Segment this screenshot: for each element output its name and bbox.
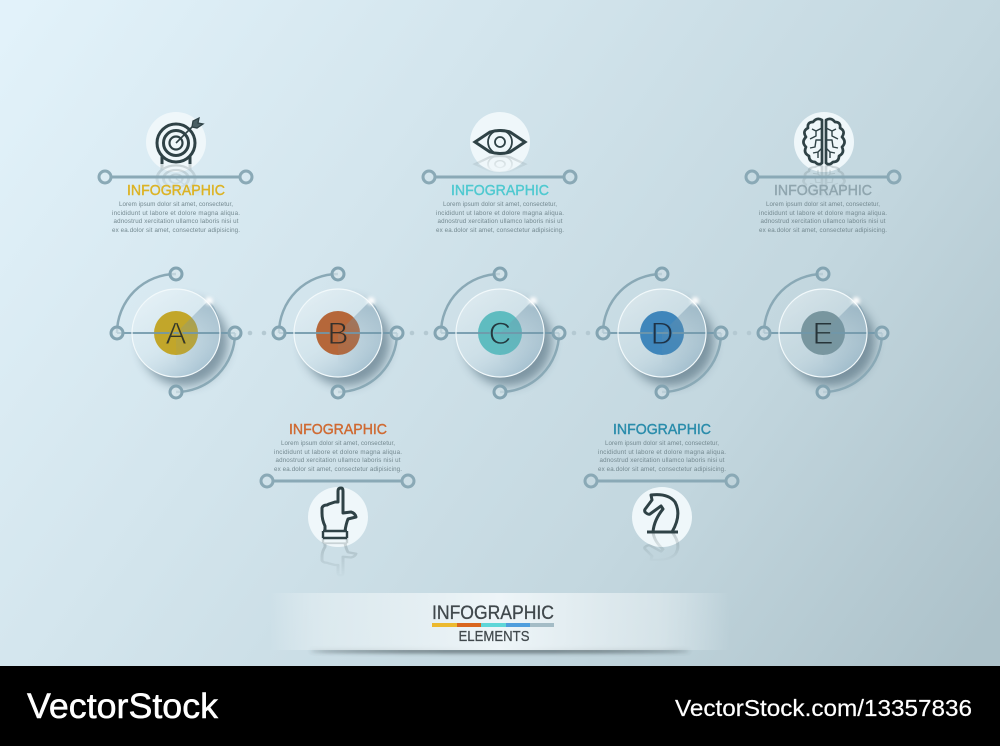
panel: step B bottom callout xyxy=(261,422,414,576)
body text: Lorem ipsum dolor sit amet, consectetur, xyxy=(443,201,557,208)
body text: adnostrud xercitation ullamco laboris nisi ut xyxy=(438,218,563,225)
heading: INFOGRAPHIC xyxy=(289,422,387,438)
connector dots between steps xyxy=(248,331,751,335)
connector line with end nodes xyxy=(746,171,900,183)
body text: ex ea.dolor sit amet, consectetur adipisicing. xyxy=(598,466,726,473)
heading: INFOGRAPHIC xyxy=(127,183,225,199)
panel: step D bottom callout xyxy=(585,422,738,560)
body text: Lorem ipsum dolor sit amet, consectetur, xyxy=(281,440,395,447)
body text: incididunt ut labore et dolore magna aliqua. xyxy=(112,210,240,217)
title banner xyxy=(270,593,730,653)
icon: eye xyxy=(470,112,530,172)
body text: Lorem ipsum dolor sit amet, consectetur, xyxy=(605,440,719,447)
icon: pointing hand xyxy=(308,487,368,576)
connector line with end nodes xyxy=(585,475,738,487)
letter B: B xyxy=(327,315,349,351)
body text: adnostrud xercitation ullamco laboris nisi ut xyxy=(760,218,886,225)
body text xyxy=(759,201,887,234)
body text: ex ea.dolor sit amet, consectetur adipisicing. xyxy=(274,466,402,473)
body text xyxy=(598,440,726,473)
body text: incididunt ut labore et dolore magna aliqua. xyxy=(436,210,564,217)
panel: step E top callout xyxy=(746,112,900,234)
colour bar xyxy=(432,623,554,627)
body text: ex ea.dolor sit amet, consectetur adipisicing. xyxy=(759,227,887,234)
connector line with end nodes xyxy=(423,171,576,183)
letter C: C xyxy=(489,315,511,351)
step E glass circle xyxy=(758,268,888,398)
subtitle text: ELEMENTS xyxy=(458,628,530,645)
body text xyxy=(436,201,564,234)
heading: INFOGRAPHIC xyxy=(613,422,711,438)
panel: step C top callout xyxy=(423,112,576,234)
icon: target with arrow xyxy=(146,112,206,196)
body text: Lorem ipsum dolor sit amet, consectetur, xyxy=(766,201,880,208)
body text: adnostrud xercitation ullamco laboris nisi ut xyxy=(600,457,725,464)
body text: Lorem ipsum dolor sit amet, consectetur, xyxy=(119,201,233,208)
body text: adnostrud xercitation ullamco laboris nisi ut xyxy=(276,457,401,464)
step C glass circle xyxy=(435,268,565,398)
body text: ex ea.dolor sit amet, consectetur adipisicing. xyxy=(112,227,240,234)
icon: chess knight xyxy=(632,487,692,560)
step A glass circle xyxy=(111,268,241,398)
footer url: VectorStock.com/13357836 xyxy=(675,695,972,721)
body text: adnostrud xercitation ullamco laboris nisi ut xyxy=(114,218,239,225)
icon: brain xyxy=(794,112,854,197)
body text: incididunt ut labore et dolore magna aliqua. xyxy=(598,449,726,456)
connector line with end nodes xyxy=(99,171,252,183)
footer band xyxy=(0,666,1000,746)
footer brand: VectorStock xyxy=(27,687,219,726)
step B glass circle xyxy=(273,268,403,398)
heading: INFOGRAPHIC xyxy=(774,183,872,199)
body text: incididunt ut labore et dolore magna aliqua. xyxy=(759,210,887,217)
body text: incididunt ut labore et dolore magna aliqua. xyxy=(274,449,402,456)
letter D: D xyxy=(651,315,673,351)
body text xyxy=(274,440,402,473)
connector line with end nodes xyxy=(261,475,414,487)
panel: step A top callout xyxy=(99,112,252,234)
letter A: A xyxy=(165,315,187,351)
body text: ex ea.dolor sit amet, consectetur adipisicing. xyxy=(436,227,564,234)
step D glass circle xyxy=(597,268,727,398)
body text xyxy=(112,201,240,234)
title text: INFOGRAPHIC xyxy=(432,603,554,624)
heading: INFOGRAPHIC xyxy=(451,183,549,199)
letter E: E xyxy=(812,315,834,351)
